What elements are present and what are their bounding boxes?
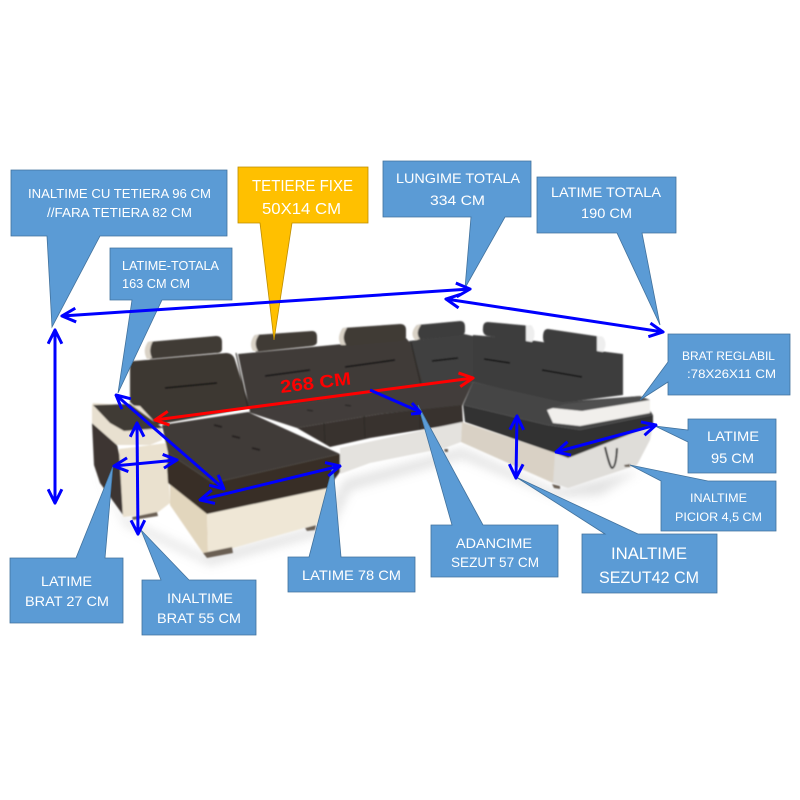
left arm top [92,403,163,445]
callout: tetiere fixe [238,167,368,340]
callout: inaltime sezut: SEZUT42 CM [599,568,699,587]
callout: brat reglabil: :78X26X11 CM [687,367,776,381]
callout: latime-totala 163 [110,248,232,393]
back cushion left [130,353,250,425]
chaise side [167,453,340,514]
callout: latime 95: 95 CM [711,450,754,466]
callout: inaltime sezut [516,477,717,593]
callout: tetiere fixe: TETIERE FIXE [252,178,353,195]
callout: inaltime cu tetiera [11,170,227,327]
sofa illustration [92,321,653,565]
back cushion right [473,335,623,403]
callout: inaltime brat: INALTIME [167,590,233,606]
callout: adancime sezut: ADANCIME [456,535,532,551]
callout: latime-totala 163: 163 CM CM [122,277,190,291]
centre base [340,422,462,474]
callout: adancime sezut: SEZUT 57 CM [451,554,539,570]
arrow: seat depth [370,390,421,414]
callout: inaltime sezut: INALTIME [611,544,687,563]
arrow: total length [62,289,470,316]
arrow: inner width 268 [155,378,473,420]
callout: brat reglabil [640,334,790,400]
callout: inaltime cu tetiera: INALTIME CU TETIERA 96 CM [28,187,211,201]
callout: latime totala: LATIME TOTALA [551,184,662,200]
back cushion corner [409,334,473,386]
tufting [214,425,260,450]
callout: inaltime picior: PICIOR 4,5 CM [675,510,762,524]
callout: latime 78: LATIME 78 CM [302,567,401,583]
chaise top [162,412,340,483]
callout: latime 95: LATIME [707,428,759,444]
callout: tetiere fixe: 50X14 CM [262,201,341,218]
headrest 2 [251,331,317,352]
arrow: chaise width [200,466,340,500]
headrest 3 [339,324,406,346]
right base end [553,425,653,488]
callout: lungime totala: 334 CM [430,192,485,208]
centre seat front [297,405,463,447]
right base [461,422,568,483]
chaise base side [170,483,208,553]
storage handle [605,447,617,468]
back slots [165,358,582,388]
right seat top [463,382,653,430]
callout: adancime sezut [418,405,558,577]
arrow: seat height [516,416,517,478]
right seat front [463,405,653,458]
callout: inaltime picior [630,465,776,531]
arrow: total width [446,299,663,332]
callout: inaltime brat [141,530,256,635]
arrow: total height [54,330,56,503]
headrest 6 [543,329,606,352]
label: 268 CM: 268 CM [279,368,352,397]
headrest 4 [412,321,465,340]
callout: inaltime cu tetiera: //FARA TETIERA 82 CM [47,206,192,220]
seat seams [324,411,420,443]
callout: latime totala [537,177,676,325]
arrow: chaise depth [116,395,224,489]
callout: latime brat: BRAT 27 CM [25,593,109,609]
centre seat top [248,382,473,428]
left arm body [92,423,170,517]
headrest 1 [145,336,222,359]
headrest 5 [483,322,534,342]
callout: brat reglabil: BRAT REGLABIL [682,349,775,363]
chaise base front [207,487,328,553]
callout: latime totala: 190 CM [581,205,632,221]
right armrest [547,396,650,426]
callout: latime brat [10,466,123,623]
arrow: arm height [137,423,138,534]
callout: inaltime picior: INALTIME [690,491,747,505]
floor shadow [95,448,640,565]
arrow: right seat width [556,425,656,452]
arrow: arm width [114,460,177,466]
callout: latime-totala 163: LATIME-TOTALA [122,259,220,273]
callout: latime 78 [288,465,415,592]
callout: lungime totala: LUNGIME TOTALA [396,170,521,186]
feet [132,449,630,558]
callout: latime brat: LATIME [41,573,92,589]
callout: inaltime brat: BRAT 55 CM [157,610,241,626]
back seams [236,342,421,408]
back cushion middle [238,338,424,412]
callout: lungime totala [383,161,531,288]
callout: latime 95 [655,419,776,473]
